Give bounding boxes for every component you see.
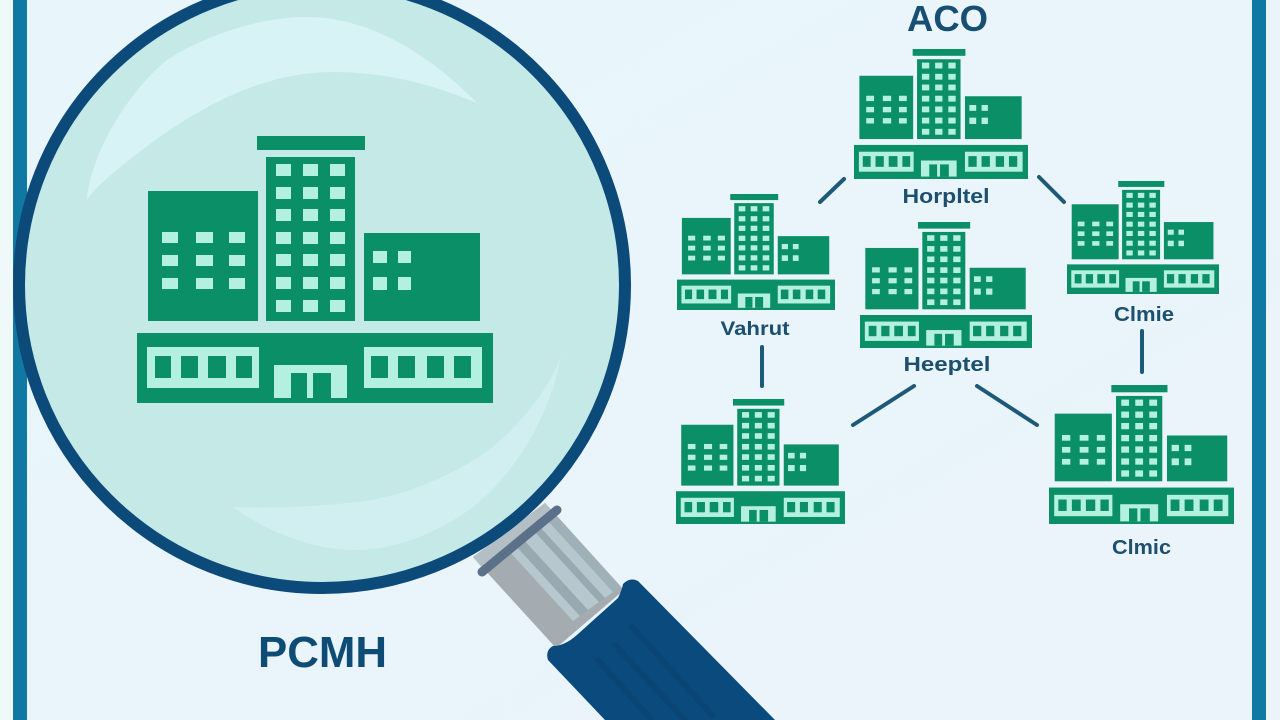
- node: center hospital: Heeptel: [904, 354, 990, 376]
- handle collar: [473, 503, 624, 648]
- node: top hospital: [854, 49, 1028, 208]
- handle grip: [547, 580, 775, 720]
- lens ring: [19, 0, 625, 588]
- node: top hospital: Horpltel: [902, 186, 990, 208]
- right border bar: [1252, 0, 1266, 720]
- lens highlight bottom: [233, 355, 561, 550]
- network connectors: [762, 177, 1142, 425]
- lens glass: [19, 0, 625, 588]
- magnifying glass handle: [473, 503, 775, 720]
- node: bottom-left building: [676, 399, 845, 524]
- collar band: [482, 510, 557, 572]
- collar stripes: [509, 516, 622, 621]
- title: PCMH: PCMH: [258, 628, 387, 677]
- left margin strip: [0, 0, 13, 720]
- building: large: [137, 136, 493, 403]
- magnifying glass lens: [19, 0, 625, 588]
- node: left building: Vahrut: [720, 319, 790, 340]
- lens highlight top: [87, 17, 477, 200]
- node: bottom-right clinic: Clmic: [1112, 537, 1171, 559]
- left border bar: [13, 0, 27, 720]
- grip grooves: [598, 627, 712, 720]
- node: right clinic: [1067, 181, 1219, 326]
- node: bottom-right clinic: [1049, 385, 1234, 559]
- node: left building: [677, 194, 835, 340]
- node: center hospital: [860, 222, 1032, 376]
- collar neck above band: [473, 503, 556, 570]
- node: right clinic: Clmie: [1114, 304, 1174, 326]
